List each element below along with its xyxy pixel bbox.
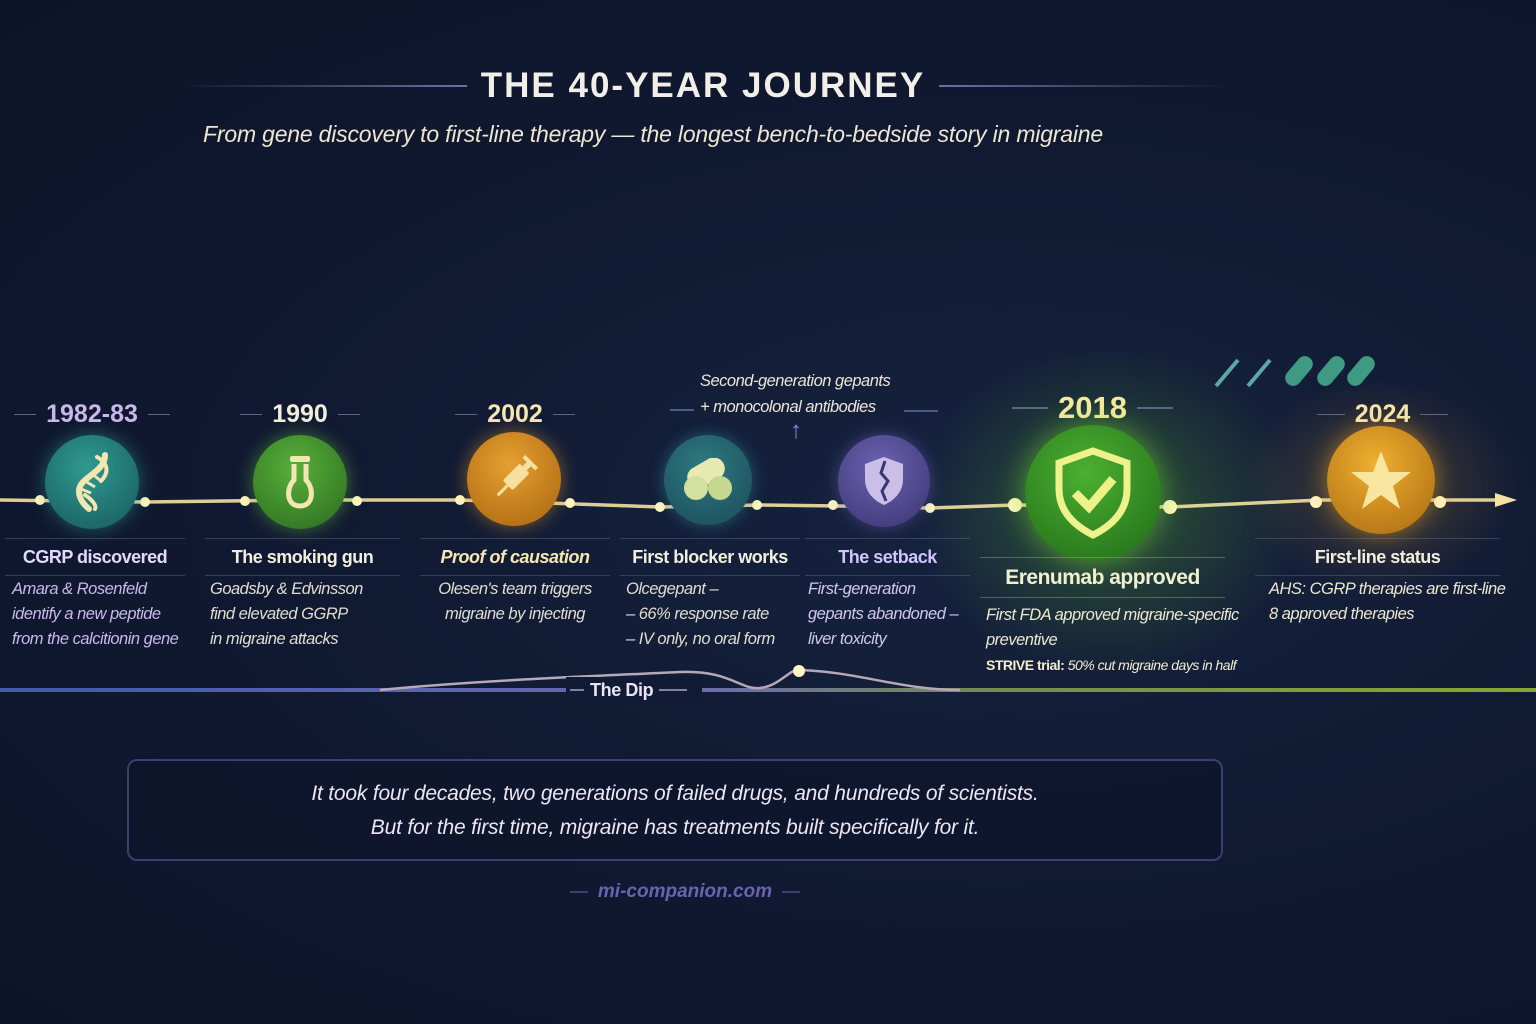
milestone 2002: Proof of causation — [440, 547, 590, 567]
title: THE 40-YEAR JOURNEY — [481, 66, 925, 105]
milestone 1982-83: Amara & Rosenfeld — [12, 580, 147, 598]
milestone 2018: Erenumab approved — [1005, 566, 1200, 589]
milestone 2018 — [980, 390, 1240, 673]
icon: cracked shield — [838, 435, 930, 527]
milestone 2024: First-line status — [1315, 547, 1440, 567]
milestone: first blocker: – 66% response rate — [626, 605, 769, 623]
label: the dip: The Dip — [590, 680, 653, 700]
milestone 1990 — [205, 400, 400, 648]
milestone 2024: 2024 — [1355, 400, 1410, 428]
milestone 1990: in migraine attacks — [210, 630, 338, 648]
callout — [127, 759, 1223, 861]
milestone 2018: 2018 — [1058, 390, 1127, 425]
milestone 1990: Goadsby & Edvinsson — [210, 580, 363, 598]
milestone: setback: liver toxicity — [808, 630, 886, 648]
icon: DNA — [45, 435, 139, 529]
milestone 2002: 2002 — [487, 400, 543, 428]
milestone: first blocker: – IV only, no oral form — [626, 630, 775, 648]
milestone 1982-83: from the calcitionin gene — [12, 630, 178, 648]
milestone: first blocker: Olcegepant – — [626, 580, 718, 598]
icons: therapies — [1214, 356, 1375, 388]
milestone 2002: Olesen's team triggers — [438, 580, 592, 598]
milestone 2024: AHS: CGRP therapies are first-line — [1269, 580, 1505, 598]
milestone 2018: preventive — [986, 631, 1057, 649]
milestone 2024 — [1255, 400, 1506, 623]
icon: syringe — [467, 432, 561, 526]
milestone 1982-83: identify a new peptide — [12, 605, 161, 623]
icon: flask — [253, 435, 347, 529]
milestone 2002 — [420, 400, 610, 623]
background glow: 2018 — [900, 330, 1320, 690]
milestone 1990: find elevated GGRP — [210, 605, 348, 623]
label: the dip — [566, 677, 702, 703]
milestone: first blocker — [620, 428, 800, 648]
milestone 1990: The smoking gun — [232, 547, 373, 567]
milestone: setback — [805, 427, 970, 648]
milestone 2018: STRIVE trial: 50% cut migraine days in half — [986, 657, 1236, 673]
milestone 2002: migraine by injecting — [445, 605, 585, 623]
milestone 2018: First FDA approved migraine-specific — [986, 606, 1239, 624]
icon: pills — [664, 435, 752, 525]
footer: mi-companion.com — [598, 881, 772, 902]
annotation: second generation: + monocolonal antibodies — [700, 398, 876, 416]
milestone 1982-83 — [5, 400, 185, 648]
icon: shield check — [1025, 425, 1161, 561]
milestone 1982-83: CGRP discovered — [23, 547, 167, 567]
milestone: setback: First-generation — [808, 580, 916, 598]
milestone 1982-83: 1982-83 — [46, 400, 138, 428]
callout: But for the first time, migraine has treatments built specifically for it. — [371, 816, 979, 839]
milestone: setback: The setback — [838, 547, 937, 567]
arrow up: ↑ — [790, 417, 802, 444]
milestone 2024: 8 approved therapies — [1269, 605, 1414, 623]
milestone: setback: gepants abandoned – — [808, 605, 958, 623]
background glow: 2024 — [1230, 370, 1530, 600]
annotation: second generation — [670, 372, 938, 444]
milestone: first blocker: First blocker works — [632, 547, 788, 567]
icon: star — [1327, 426, 1435, 534]
callout: It took four decades, two generations of failed drugs, and hundreds of scientists. — [311, 782, 1039, 805]
subtitle: From gene discovery to first-line therapy — the longest bench-to-bedside story in migraine — [203, 121, 1103, 147]
milestone 1990: 1990 — [272, 400, 328, 428]
annotation: second generation: Second-generation gepants — [700, 372, 890, 390]
